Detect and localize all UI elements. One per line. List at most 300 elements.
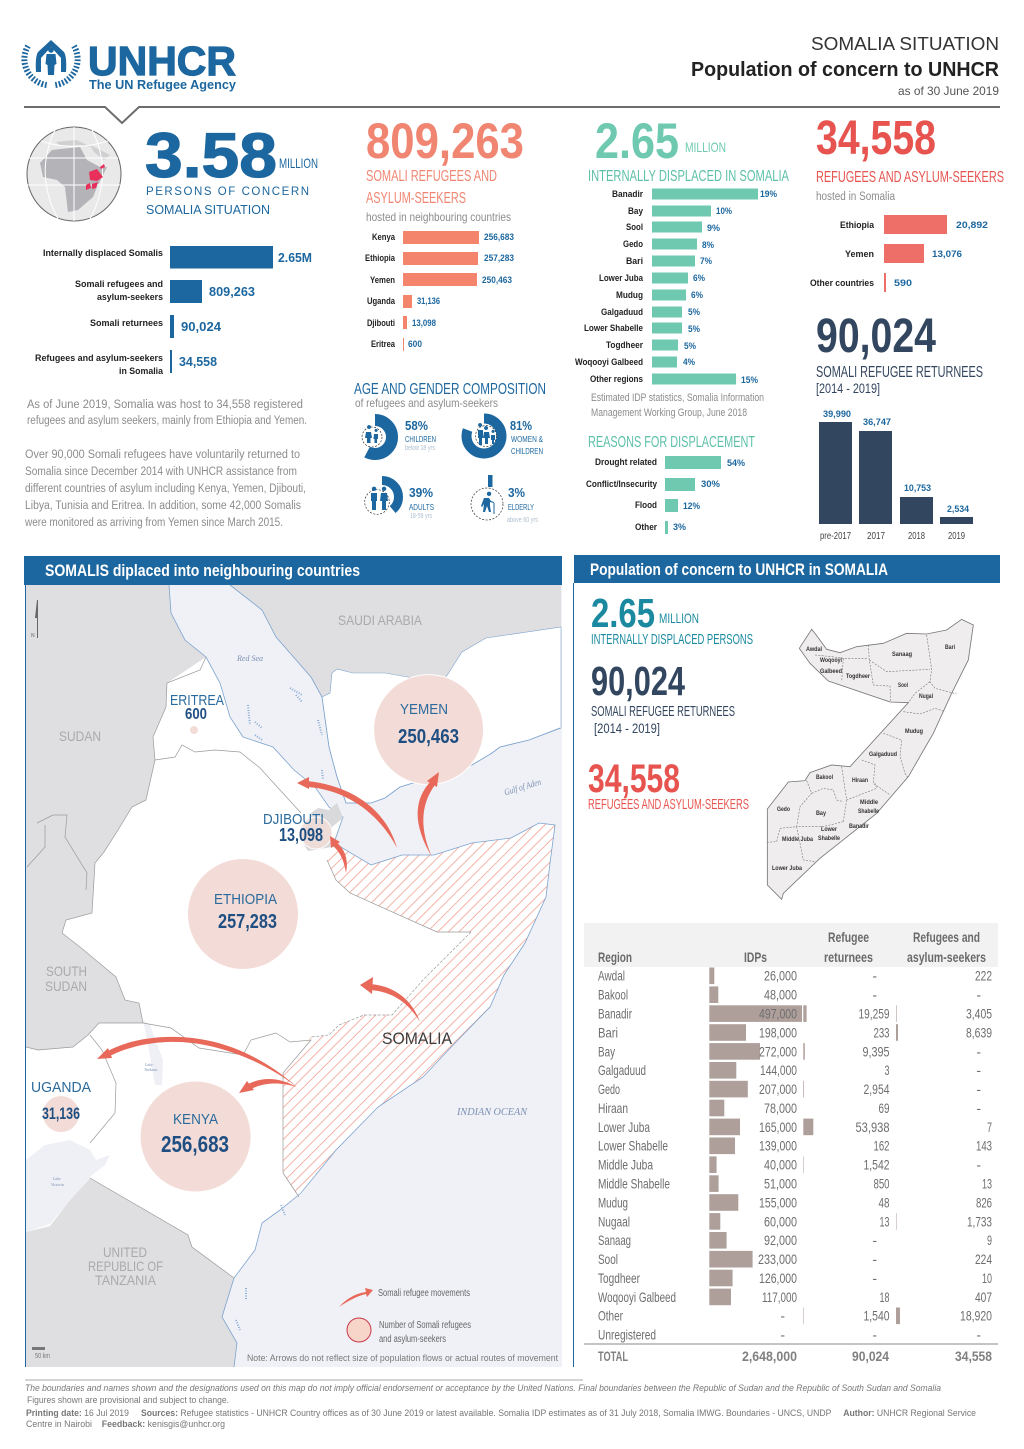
table column: refugee returnees: - <box>872 1327 877 1343</box>
bar chart: persons of concern breakdown: 809,263 <box>209 284 255 299</box>
bar chart: persons of concern breakdown: in Somalia <box>119 366 164 376</box>
table column: refugee returnees: 2,954 <box>864 1081 890 1097</box>
bar chart: refugees by host country: 13,098 <box>412 318 436 328</box>
map: Somalia regions: Awdal <box>806 647 822 653</box>
bar chart: reasons for displacement: 12% <box>683 501 700 511</box>
bar chart: IDPs by region: Sool <box>626 222 643 232</box>
donut: children 58%: 58% <box>405 418 428 433</box>
table rows: regions: Awdal <box>598 968 625 984</box>
heading: Somali refugee returnees: 90,024 <box>816 310 936 363</box>
text block: Somalia context: Libya, Tunisia and Eritrea. In addition, some 42,000 Somalis <box>25 500 301 512</box>
table rows: regions: Middle Juba <box>598 1157 653 1173</box>
bar chart: IDPs by region: 6% <box>691 290 703 300</box>
map: Somalia regions: Sanaag <box>892 652 912 658</box>
table column: refugees and asylum-seekers: 8,639 <box>966 1024 992 1040</box>
table column: refugees and asylum-seekers: - <box>976 1043 981 1059</box>
table header: returnees <box>824 949 873 965</box>
table column: refugee returnees: 19,259 <box>858 1006 890 1022</box>
map: country figures: ERITREA <box>170 692 224 709</box>
bar chart: IDPs by region: 5% <box>688 307 700 317</box>
table header <box>584 923 998 967</box>
headline: 3.58 million persons of concern <box>145 121 318 217</box>
table header: IDPs <box>744 949 767 965</box>
donut: children 58% <box>358 418 436 454</box>
table rows: regions: Middle Shabelle <box>598 1176 670 1192</box>
table column: refugee returnees: 1,542 <box>864 1157 890 1173</box>
bar chart: IDPs by region: 6% <box>693 273 705 283</box>
map: place labels: INDIAN OCEAN <box>456 1107 528 1118</box>
table column: refugees and asylum-seekers: 224 <box>975 1251 992 1267</box>
map: country figures: YEMEN <box>400 701 448 718</box>
map: country figures: 31,136 <box>42 1104 80 1123</box>
table rows: regions: Bay <box>598 1043 615 1059</box>
table column: IDPs: 207,000 <box>759 1081 797 1097</box>
footer: disclaimer and sources <box>25 1383 976 1429</box>
map: country figures: KENYA <box>173 1111 218 1128</box>
table column: refugee returnees: 233 <box>874 1024 890 1040</box>
map: Somalia regions: Shabelle <box>818 836 841 842</box>
headline: 3.58 million persons of concern: MILLION <box>279 155 318 171</box>
map: Horn of Africa <box>26 585 562 1367</box>
table column: refugee returnees: 48 <box>878 1194 890 1210</box>
table rows: regions: Togdheer <box>598 1270 640 1286</box>
bar chart: refugees by host country: Yemen <box>370 275 395 285</box>
map: country figures: 13,098 <box>279 825 323 845</box>
figures: Somalia key numbers: MILLION <box>659 610 699 626</box>
table rows: regions: Lower Shabelle <box>598 1138 668 1154</box>
bar chart: reasons for displacement: REASONS FOR DISPLACEMENT <box>588 434 755 451</box>
table column: IDPs: 144,000 <box>760 1062 797 1078</box>
map land: white Ethiopia, Eritrea, Kenya, Uganda, Somalia <box>26 657 555 1278</box>
bar chart: IDPs by region: Lower Juba <box>599 273 644 283</box>
table column: IDPs: 155,000 <box>759 1194 797 1210</box>
table column: refugees and asylum-seekers: - <box>976 987 981 1003</box>
donut: adults 39%: 18-59 yrs <box>410 513 432 520</box>
logo: UNHCR: UNHCR <box>88 38 236 84</box>
donut: women and children 81%: WOMEN & <box>511 434 543 444</box>
map legend <box>339 1288 471 1345</box>
map: Somalia regions: Middle Juba <box>782 837 814 843</box>
table column: refugee returnees: 1,540 <box>864 1308 890 1324</box>
bar chart: reasons for displacement: Flood <box>635 500 657 510</box>
bar chart: persons of concern breakdown: Somali refugees and <box>75 279 163 289</box>
bar chart: returnees by year: 39,990 <box>823 409 851 419</box>
heading: refugees and asylum-seekers hosted in Somalia <box>816 112 1004 203</box>
table column: refugee returnees: 18 <box>880 1289 890 1305</box>
map: Somalia hatched territory <box>283 823 555 1197</box>
map: country figures: UGANDA <box>31 1079 91 1096</box>
bar chart: IDPs by region: 4% <box>683 357 695 367</box>
bar chart: IDPs by region: Other regions <box>590 374 643 384</box>
map: place labels: SUDAN <box>59 728 101 744</box>
table column: IDPs: 78,000 <box>764 1100 797 1116</box>
heading: internally displaced in Somalia: 2.65 <box>595 113 679 169</box>
icon: UNHCR emblem <box>24 40 78 85</box>
bar chart: returnees by year: 2,534 <box>947 504 969 514</box>
map: place labels <box>45 612 543 1288</box>
table column: refugee returnees: - <box>872 1232 877 1248</box>
table column: IDPs: 40,000 <box>764 1157 797 1173</box>
map: place labels: Lake <box>144 1062 153 1067</box>
table column: refugee returnees: - <box>872 1270 877 1286</box>
map: Somalia regions: Nugal <box>919 694 933 700</box>
table header: Region <box>598 949 632 965</box>
map: Somalia regions: Mudug <box>905 729 923 735</box>
map: country figures: 257,283 <box>218 911 277 933</box>
table column: refugees and asylum-seekers: 222 <box>975 968 992 984</box>
bar chart: refugees in Somalia by origin: Yemen <box>845 249 874 259</box>
bar chart: reasons for displacement: Conflict/Insecurity <box>586 479 657 489</box>
table rows: regions: Gedo <box>598 1081 620 1097</box>
donut: adults 39%: ADULTS <box>409 502 434 512</box>
table column: refugees and asylum-seekers: 826 <box>976 1194 992 1210</box>
bar chart: reasons for displacement: 54% <box>727 458 745 468</box>
table column: refugees and asylum-seekers: - <box>976 1157 981 1173</box>
map: place labels: UNITED <box>103 1244 147 1260</box>
map: place labels: Gulf of Aden <box>503 776 543 797</box>
table total row: 90,024 <box>852 1348 889 1364</box>
map: Somalia regions <box>767 619 973 899</box>
table column: refugees and asylum-seekers: 7 <box>987 1119 992 1135</box>
title block: as of 30 June 2019 <box>898 84 999 98</box>
heading: Somali refugee returnees <box>816 310 983 396</box>
table bars <box>709 968 900 1324</box>
bar chart: refugees by host country: Ethiopia <box>365 253 396 263</box>
figures: Somalia key numbers: SOMALI REFUGEE RETURNEES <box>591 703 735 720</box>
bar chart: IDPs by region: Bay <box>628 206 643 216</box>
text block: Somalia context: Somalia since December 2014 with UNHCR assistance from <box>25 466 297 478</box>
bar chart: persons of concern breakdown: Somali returnees <box>90 318 163 328</box>
bar chart: refugees by host country <box>365 231 514 351</box>
bar chart: returnees by year: 2018 <box>908 531 925 542</box>
heading: Somali refugees and asylum-seekers: SOMALI REFUGEES AND <box>366 168 497 185</box>
heading: Somali refugees and asylum-seekers: hosted in neighbouring countries <box>366 210 511 224</box>
table column: refugees and asylum-seekers <box>960 968 992 1343</box>
text block: IDP source note: Management Working Group, June 2018 <box>591 407 747 419</box>
bar chart: refugees in Somalia by origin <box>810 215 988 292</box>
table column: IDPs: 198,000 <box>759 1024 797 1040</box>
bar chart: reasons for displacement: Drought related <box>595 457 657 467</box>
map: Somalia regions: Lower <box>821 827 838 833</box>
heading: internally displaced in Somalia: MILLION <box>685 139 726 155</box>
bar chart: IDPs by region: 10% <box>716 206 732 216</box>
table total row: 34,558 <box>955 1348 992 1364</box>
bar chart: reasons for displacement: Other <box>635 522 657 532</box>
table rows: regions: Nugaal <box>598 1213 630 1229</box>
table total row: 2,648,000 <box>742 1348 797 1364</box>
table rows: regions: Mudug <box>598 1194 628 1210</box>
map: country figures <box>31 692 459 1157</box>
bar chart: reasons for displacement <box>586 434 755 534</box>
bar chart: persons of concern breakdown: Refugees and asylum-seekers <box>35 353 163 363</box>
bar chart: returnees by year: pre-2017 <box>820 531 851 542</box>
table column: refugee returnees: - <box>872 968 877 984</box>
map: place labels: SOMALIA <box>382 1029 453 1048</box>
table rows: regions: Woqooyi Galbeed <box>598 1289 676 1305</box>
figures: Somalia key numbers: [2014 - 2019] <box>594 720 660 736</box>
table column: IDPs: 51,000 <box>764 1176 797 1192</box>
table column: refugees and asylum-seekers: 143 <box>976 1138 992 1154</box>
map: Somalia regions: Galgaduud <box>869 752 897 758</box>
bar chart: persons of concern breakdown: Internally displaced Somalis <box>43 248 163 258</box>
figures: Somalia key numbers <box>588 590 753 813</box>
panel heading: Somalis displaced into neighbouring countries: SOMALIS diplaced into neighbouring countries <box>45 561 360 580</box>
logo: UNHCR: The UN Refugee Agency <box>89 77 237 92</box>
map land: white Yemen and Oman <box>322 627 561 803</box>
bar chart: returnees by year: 2019 <box>948 531 965 542</box>
table rows: regions: Lower Juba <box>598 1119 650 1135</box>
table rows: regions: Galgaduud <box>598 1062 646 1078</box>
panel: age and gender composition: of refugees and asylum-seekers <box>355 396 498 410</box>
donut: women and children 81% <box>466 418 543 456</box>
table column: refugees and asylum-seekers: 18,920 <box>960 1308 992 1324</box>
map: Somalia regions: Banadir <box>849 824 870 830</box>
table column: refugees and asylum-seekers: - <box>976 1327 981 1343</box>
text block: IDP source note: Estimated IDP statistics, Somalia Information <box>591 392 764 404</box>
table column: refugees and asylum-seekers: - <box>976 1081 981 1097</box>
table rows: regions <box>598 968 676 1343</box>
table rows: regions: Other <box>598 1308 623 1324</box>
title block <box>691 34 1000 98</box>
bar chart: IDPs by region: 7% <box>700 256 712 266</box>
donut: elderly 3%: above 60 yrs <box>507 517 538 524</box>
table total row: TOTAL <box>598 1348 628 1364</box>
bar chart: returnees by year: 36,747 <box>863 417 891 427</box>
bar chart: refugees by host country: 31,136 <box>417 296 440 306</box>
table column: refugees and asylum-seekers: 9 <box>987 1232 992 1248</box>
table column: refugee returnees: - <box>872 987 877 1003</box>
donut: children 58%: CHILDREN <box>405 434 436 444</box>
bar chart: IDPs by region: 5% <box>684 341 696 351</box>
map: place labels: REPUBLIC OF <box>88 1258 163 1274</box>
bar chart: refugees in Somalia by origin: Other countries <box>810 278 874 288</box>
text block: Somalia context: Over 90,000 Somali refugees have voluntarily returned to <box>25 449 300 461</box>
table column: IDPs: 165,000 <box>759 1119 797 1135</box>
map: Somalia regions: Middle <box>860 800 879 806</box>
table column: IDPs: 60,000 <box>764 1213 797 1229</box>
bar chart: refugees by host country: Uganda <box>367 296 396 306</box>
text block: Somalia context: different countries of asylum including Kenya, Yemen, Djibouti, <box>25 483 306 495</box>
figures: Somalia key numbers: 2.65 <box>591 590 655 636</box>
map: Somalia regions: Sool <box>898 683 908 689</box>
map legend: Somali refugee movements <box>378 1288 470 1299</box>
figures: Somalia key numbers: REFUGEES AND ASYLUM-SEEKERS <box>588 796 749 813</box>
bar chart: refugees in Somalia by origin: Ethiopia <box>840 220 875 230</box>
table column: IDPs: 272,000 <box>759 1043 797 1059</box>
text block: Somalia context: refugees and asylum seekers, mainly from Ethiopia and Yemen. <box>27 415 307 427</box>
map: country figures: 256,683 <box>161 1131 229 1157</box>
map: country borders <box>26 657 471 1278</box>
table column: IDPs: 233,000 <box>758 1251 797 1267</box>
bar chart: IDPs by region <box>575 188 777 385</box>
bar chart: IDPs by region: 15% <box>741 375 758 385</box>
map: Somalia regions: Galbeed <box>820 669 842 675</box>
donut: adults 39%: 39% <box>409 485 433 500</box>
bar chart: refugees by host country: 600 <box>408 339 422 349</box>
heading: Somali refugee returnees: [2014 - 2019] <box>816 380 880 396</box>
table column: refugees and asylum-seekers: 407 <box>975 1289 992 1305</box>
panel: age and gender composition: AGE AND GENDER COMPOSITION <box>354 381 546 398</box>
table column: refugee returnees: 9,395 <box>862 1043 890 1059</box>
title block: Population of concern to UNHCR <box>691 59 1000 81</box>
table column: IDPs: 139,000 <box>759 1138 797 1154</box>
donut: children 58%: below 18 yrs <box>405 445 435 452</box>
figures: Somalia key numbers: 90,024 <box>591 658 685 704</box>
table column: refugee returnees: 850 <box>874 1176 890 1192</box>
bar chart: returnees by year: 2017 <box>867 531 885 542</box>
footer: disclaimer and sources: Centre in Nairobi Feedback: kenisgis@unhcr.org <box>26 1419 225 1429</box>
map: place labels: SUDAN <box>45 978 87 994</box>
table column: refugee returnees: 13 <box>880 1213 890 1229</box>
map: north arrow: N <box>31 633 35 639</box>
text block: Somalia context: As of June 2019, Somalia was host to 34,558 registered <box>27 399 303 411</box>
map: refugee movement arrows <box>97 772 439 1093</box>
heading: refugees and asylum-seekers hosted in Somalia: 34,558 <box>816 112 936 165</box>
map note: Note: Arrows do not reflect size of population flows or actual routes of movement <box>247 1353 558 1364</box>
bar chart: refugees by host country: Kenya <box>372 232 396 242</box>
bar chart: IDPs by region: Mudug <box>616 290 643 300</box>
text block: Somalia context <box>24 399 307 529</box>
bar chart: returnees by year: 10,753 <box>904 483 931 493</box>
map: place labels: Red Sea <box>236 654 263 663</box>
map: islands <box>236 688 323 1330</box>
bar chart: IDPs by region: 19% <box>760 189 777 199</box>
heading: Somali refugees and asylum-seekers: ASYLUM-SEEKERS <box>366 190 466 207</box>
footer: disclaimer and sources: Figures shown are provisional and subject to change. <box>27 1395 229 1405</box>
map legend: Number of Somali refugees <box>379 1320 471 1331</box>
table column: refugee returnees: 53,938 <box>856 1119 890 1135</box>
map: Somalia regions: Gedo <box>777 807 790 813</box>
heading: internally displaced in Somalia: INTERNALLY DISPLACED IN SOMALIA <box>588 168 789 185</box>
panel heading: Somalis displaced into neighbouring countries <box>24 556 562 585</box>
bar chart: reasons for displacement: 3% <box>673 522 686 532</box>
heading: internally displaced in Somalia <box>588 113 789 185</box>
bar chart: IDPs by region: Banadir <box>612 189 643 199</box>
map: place labels: Victoria <box>51 1182 64 1187</box>
map: place labels: SAUDI ARABIA <box>338 612 423 628</box>
table column: IDPs: - <box>780 1327 785 1343</box>
table column: refugee returnees: - <box>872 1251 877 1267</box>
bar chart: persons of concern breakdown: 90,024 <box>181 319 222 334</box>
map: scale bar <box>32 1347 50 1360</box>
table header: asylum-seekers <box>907 949 986 965</box>
panel heading: population of concern in Somalia: Population of concern to UNHCR in SOMALIA <box>590 560 888 579</box>
map: scale bar: 50 km <box>35 1353 50 1360</box>
table column: IDPs: - <box>780 1308 785 1324</box>
map: country figures: ETHIOPIA <box>214 891 277 908</box>
bar chart: refugees by host country: Djibouti <box>367 318 395 328</box>
table column: refugees and asylum-seekers: - <box>976 1100 981 1116</box>
donut: adults 39% <box>365 480 434 520</box>
headline: 3.58 million persons of concern: PERSONS OF CONCERN <box>146 186 309 198</box>
bar chart: IDPs by region: Gedo <box>623 239 643 249</box>
map: coastlines <box>169 585 555 1367</box>
donut: women and children 81%: 81% <box>510 418 532 433</box>
heading: Somali refugees and asylum-seekers <box>366 113 524 224</box>
table rows: regions: Unregistered <box>598 1327 656 1343</box>
figures: Somalia key numbers: 34,558 <box>588 757 680 801</box>
map: Somalia regions: Bay <box>816 811 827 817</box>
table column: refugee returnees <box>856 968 890 1343</box>
map: country figures: 250,463 <box>398 726 459 748</box>
table rows: regions: Bakool <box>598 987 628 1003</box>
table column: refugee returnees: 69 <box>878 1100 890 1116</box>
bar chart: refugees by host country: 256,683 <box>484 232 514 242</box>
table rows: regions: Hiraan <box>598 1100 628 1116</box>
bar chart: refugees in Somalia by origin: 13,076 <box>932 249 962 259</box>
bar chart: IDPs by region: 8% <box>702 240 714 250</box>
table total row <box>584 1344 998 1364</box>
table column: IDPs: 497,000 <box>759 1006 797 1022</box>
map land: grey neighbouring countries <box>26 585 206 1050</box>
table column: refugee returnees: 162 <box>874 1138 890 1154</box>
bar chart: IDPs by region: Galgaduud <box>601 307 643 317</box>
donut: elderly 3%: 3% <box>508 485 525 500</box>
text block: Somalia context: were monitored as arriving from Yemen since March 2015. <box>24 517 283 529</box>
table column: refugees and asylum-seekers: - <box>976 1062 981 1078</box>
map: north arrow <box>31 600 38 639</box>
map: place labels: Turkana <box>144 1067 157 1072</box>
headline: 3.58 million persons of concern: SOMALIA SITUATION <box>146 203 270 217</box>
bar chart: refugees by host country: 257,283 <box>484 253 514 263</box>
headline: 3.58 million persons of concern: 3.58 <box>145 121 277 191</box>
table column: IDPs: 126,000 <box>759 1270 797 1286</box>
map: Djibouti <box>301 803 343 851</box>
bar chart: persons of concern breakdown <box>35 246 312 376</box>
bar chart: returnees by year <box>819 409 973 542</box>
footer: disclaimer and sources: The boundaries and names shown and the designations used on this map do not imply official endorsement or acceptance by the United Nations. Final boundaries between the Republic of Sudan and the Republic of South Sudan and Somalia <box>25 1383 941 1393</box>
table column: IDPs <box>758 968 797 1343</box>
bar chart: refugees by host country: 250,463 <box>482 275 512 285</box>
icon: globe locator <box>27 127 121 221</box>
table: population by region <box>584 923 998 1364</box>
table column: refugee returnees: 3 <box>884 1062 890 1078</box>
map: population circles <box>42 675 484 1192</box>
table header: Refugee <box>828 929 869 945</box>
bar chart: refugees in Somalia by origin: 590 <box>894 278 912 288</box>
figures: Somalia key numbers: INTERNALLY DISPLACED PERSONS <box>591 631 753 648</box>
table rows: regions: Banadir <box>598 1006 632 1022</box>
map: Somalia regions: Bari <box>945 645 955 651</box>
map: Somalia regions: Bakool <box>816 775 833 781</box>
bar chart: IDPs by region: Bari <box>626 256 643 266</box>
map: Somalia regions: Hiraan <box>852 778 868 784</box>
text block: IDP source note <box>591 392 764 419</box>
map: lakes <box>26 1020 163 1232</box>
map: Somalia regions: Togdheer <box>846 674 871 680</box>
footer: disclaimer and sources: Printing date: 16 Jul 2019 Sources: Refugee statistics - UNHCR Country offices as of 30 June 2019 or latest available. Somalia IDP estimates as of 31 July 2018, Somalia IMWG. Boundaries - UNCS, UNDP Author: UNHCR Regional Service <box>26 1408 976 1418</box>
table column: IDPs: 92,000 <box>764 1232 797 1248</box>
bar chart: persons of concern breakdown: 34,558 <box>179 354 217 369</box>
donut: elderly 3% <box>471 475 538 524</box>
title block: SOMALIA SITUATION <box>811 34 999 54</box>
map: place labels: SOUTH <box>46 963 87 979</box>
map: place labels: TANZANIA <box>95 1272 157 1288</box>
map: Somalia regions: Shabelle <box>858 809 880 815</box>
table column: refugees and asylum-seekers: 13 <box>982 1176 992 1192</box>
bar chart: IDPs by region: Lower Shabelle <box>584 323 643 333</box>
table rows: regions: Bari <box>598 1024 618 1040</box>
map: place labels: Lake <box>52 1176 61 1181</box>
map legend: and asylum-seekers <box>379 1334 446 1345</box>
bar chart: IDPs by region: 9% <box>707 223 720 233</box>
map: Somalia regions: Lower Juba <box>772 866 803 872</box>
panel: age and gender composition <box>354 381 546 524</box>
map: Somalia regions: Woqooyi <box>820 658 842 664</box>
donut: elderly 3%: ELDERLY <box>508 502 534 512</box>
bar chart: IDPs by region: Woqooyi Galbeed <box>575 357 643 367</box>
bar chart: persons of concern breakdown: 2.65M <box>278 250 312 265</box>
